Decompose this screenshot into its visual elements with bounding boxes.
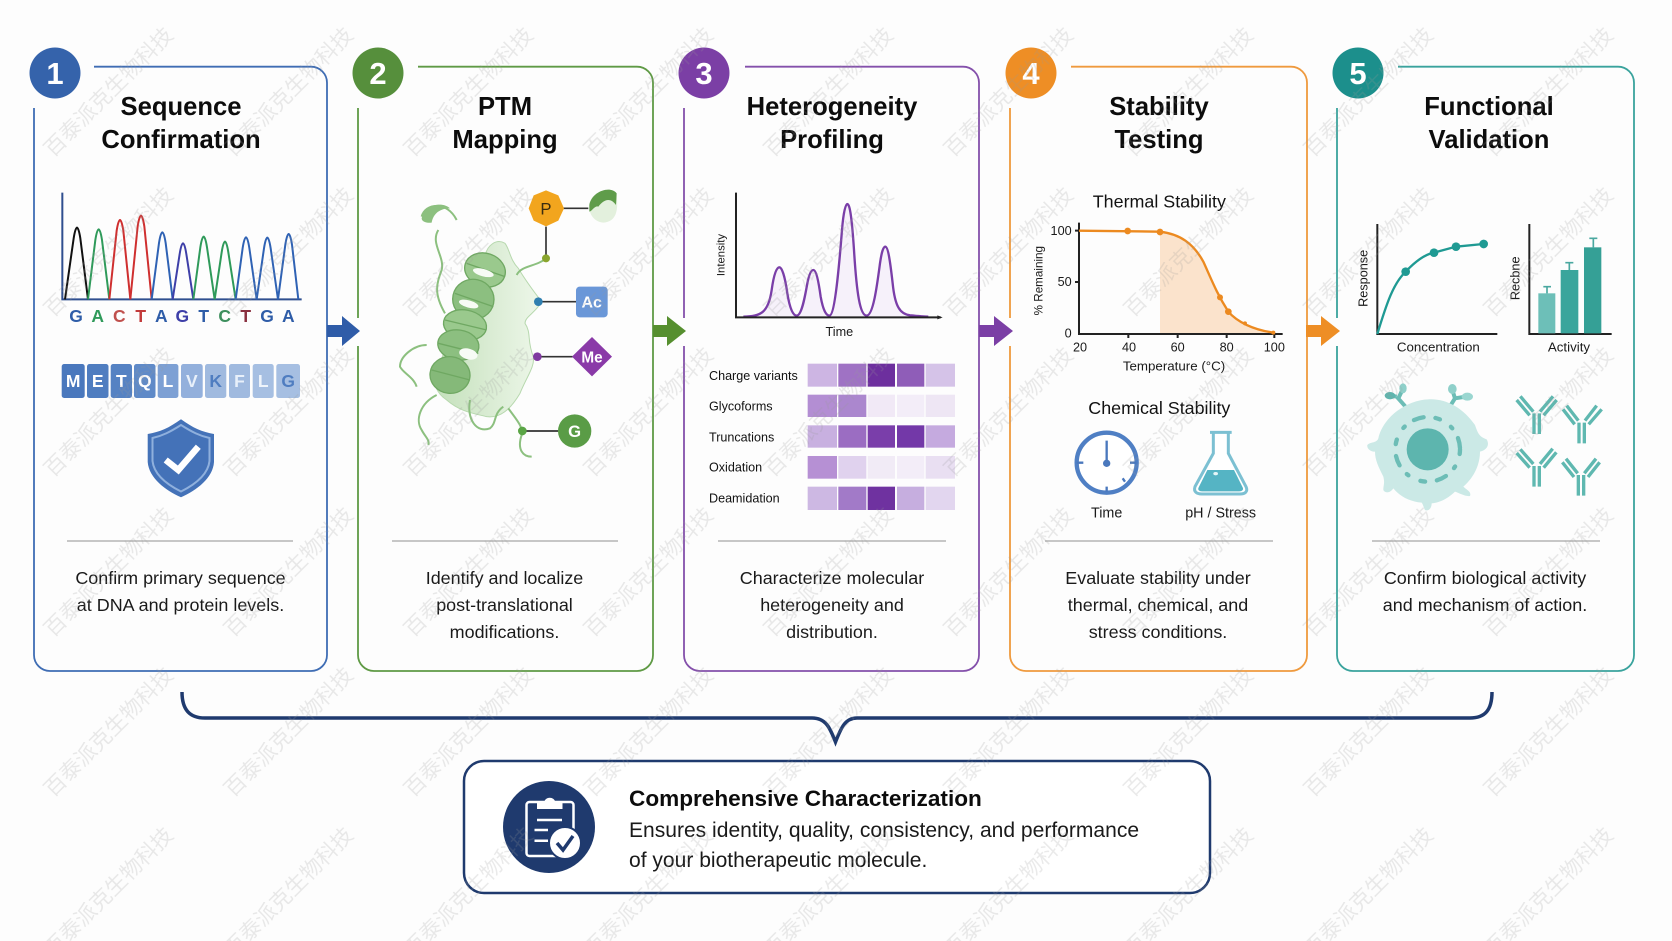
connector lines	[522, 208, 588, 431]
heading: functional validation: Functional	[1424, 93, 1554, 121]
watermark: 百泰派克生物科技	[760, 183, 898, 322]
watermark: 百泰派克生物科技	[1120, 343, 1258, 482]
description: Evaluate stability under	[1065, 568, 1251, 588]
badge: step 1	[30, 48, 80, 98]
PTM: glycosylation: G	[568, 422, 581, 441]
watermark: 百泰派克生物科技	[220, 503, 358, 642]
chart: dose response curve	[1357, 224, 1497, 355]
icon: antibodies	[1517, 396, 1602, 496]
description: modifications.	[450, 622, 559, 642]
arrow: step 1 to 2	[327, 316, 360, 346]
heatmap: variant attributes	[709, 364, 955, 510]
description: at DNA and protein levels.	[77, 595, 284, 615]
icon: clipboard check	[503, 781, 595, 873]
sequence letters: DNA bases	[69, 306, 295, 326]
description: Confirm primary sequence	[75, 568, 286, 588]
arrow: step 2 to 3	[653, 316, 686, 346]
chart: chromatogram peaks: Intensity	[716, 234, 728, 276]
heading: stability testing: Testing	[1114, 126, 1204, 154]
peptide sequence boxes: F	[234, 371, 245, 391]
heading: stability testing: Stability	[1109, 93, 1210, 121]
icon: flask	[1195, 432, 1247, 494]
panel: functional validation	[1332, 48, 1634, 671]
watermark: 百泰派克生物科技	[1480, 663, 1618, 802]
sequence letters: DNA bases: C	[218, 306, 231, 326]
sequence letters: DNA bases: G	[69, 306, 83, 326]
description: Characterize molecular	[740, 568, 924, 588]
watermark: 百泰派克生物科技	[1120, 23, 1258, 162]
sequence letters: DNA bases: T	[135, 306, 146, 326]
watermark: 百泰派克生物科技	[400, 343, 538, 482]
chart: dose response curve: Concentration	[1397, 340, 1480, 355]
watermark: 百泰派克生物科技	[1480, 183, 1618, 322]
sequence letters: DNA bases: T	[198, 306, 209, 326]
chemical stability icons: pH / Stress	[1185, 505, 1256, 521]
PTM: acetylation: Ac	[581, 295, 602, 312]
chart: activity bars: Recbne	[1509, 257, 1523, 300]
watermark: 百泰派克生物科技	[1480, 23, 1618, 162]
heading: sequence confirmation: Sequence	[121, 93, 241, 121]
watermark: 百泰派克生物科技	[940, 23, 1078, 162]
protein surface	[435, 242, 542, 417]
callout text: of your biotherapeutic molecule.	[629, 849, 927, 872]
watermark: 百泰派克生物科技	[940, 503, 1078, 642]
chart: thermal stability curve: 80	[1220, 341, 1234, 355]
watermark: 百泰派克生物科技	[940, 183, 1078, 322]
peptide sequence boxes	[62, 364, 300, 398]
description: Confirm biological activity	[1384, 568, 1586, 588]
peptide sequence boxes: L	[163, 371, 174, 391]
watermark: 百泰派克生物科技	[760, 663, 898, 802]
peptide sequence boxes: V	[186, 371, 198, 391]
heading: PTM mapping: PTM	[478, 93, 532, 121]
chart: thermal stability curve: 40	[1122, 341, 1136, 355]
chemical stability icons: Time	[1091, 505, 1122, 521]
badge: step 3	[678, 48, 730, 98]
watermark: 百泰派克生物科技	[760, 503, 898, 642]
chart: dose response curve: Response	[1357, 250, 1371, 307]
watermark: 百泰派克生物科技	[1480, 503, 1618, 642]
watermark: 百泰派克生物科技	[220, 663, 358, 802]
peptide sequence boxes: E	[92, 371, 104, 391]
watermark: 百泰派克生物科技	[40, 343, 178, 482]
chart: thermal stability curve: Thermal Stability	[1093, 191, 1226, 211]
heading: sequence confirmation: Confirmation	[101, 126, 261, 154]
callout text: Ensures identity, quality, consistency, and performance	[629, 819, 1139, 842]
watermark: 百泰派克生物科技	[220, 23, 358, 162]
sequence letters: DNA bases: A	[155, 306, 168, 326]
watermark: 百泰派克生物科技	[1300, 23, 1438, 162]
PTM: methylation: Me	[581, 349, 603, 366]
icon: clock	[1077, 433, 1137, 493]
heading: heterogeneity profiling: Profiling	[780, 126, 884, 154]
description: Identify and localize	[426, 568, 583, 588]
peptide sequence boxes: G	[281, 371, 295, 391]
heading: heterogeneity profiling: Heterogeneity	[747, 93, 918, 121]
panel: sequence confirmation	[30, 48, 327, 671]
chemical stability icons	[1077, 398, 1256, 521]
badge: step 2	[352, 48, 404, 98]
sequence letters: DNA bases: A	[91, 306, 104, 326]
chart: activity bars: Activity	[1548, 340, 1590, 355]
watermark: 百泰派克生物科技	[40, 503, 178, 642]
chart: thermal stability curve: 100	[1051, 224, 1072, 238]
badge: step 4	[1006, 48, 1056, 98]
badge: step 4: 4	[1022, 56, 1040, 91]
alpha helix	[428, 248, 510, 395]
arrow: step 3 to 4	[979, 316, 1013, 346]
icon: verified shield	[148, 419, 214, 497]
chart: thermal stability curve: 100	[1264, 341, 1285, 355]
panel: stability testing	[1006, 48, 1307, 671]
watermark: 百泰派克生物科技	[1120, 183, 1258, 322]
PTM: acetylation	[534, 287, 608, 317]
PTM: phosphorylation: P	[540, 199, 552, 218]
badge: step 5	[1332, 48, 1384, 98]
watermark: 百泰派克生物科技	[1480, 343, 1618, 482]
heading: functional validation: Validation	[1429, 126, 1549, 154]
watermark: 百泰派克生物科技	[400, 503, 538, 642]
watermark: 百泰派克生物科技	[40, 183, 178, 322]
badge: step 1: 1	[46, 56, 64, 91]
peptide sequence boxes: M	[66, 371, 80, 391]
heatmap: variant attributes: Truncations	[709, 430, 774, 444]
description: and mechanism of action.	[1383, 595, 1587, 615]
chemical stability icons: Chemical Stability	[1088, 398, 1230, 418]
summary callout	[464, 761, 1210, 893]
loops	[400, 206, 546, 457]
description: stress conditions.	[1089, 622, 1227, 642]
badge: step 2: 2	[369, 56, 387, 91]
chart: thermal stability curve: 0	[1065, 327, 1072, 341]
chart: thermal stability curve	[1033, 191, 1285, 374]
sequence letters: DNA bases: T	[240, 306, 251, 326]
sequence letters: DNA bases: A	[282, 306, 295, 326]
sequence letters: DNA bases: C	[113, 306, 126, 326]
watermark: 百泰派克生物科技	[580, 663, 718, 802]
watermark: 百泰派克生物科技	[580, 343, 718, 482]
watermark: 百泰派克生物科技	[940, 343, 1078, 482]
illustration: target cell with receptors	[1367, 383, 1488, 510]
callout heading: Comprehensive Characterization	[629, 786, 982, 811]
watermark: 百泰派克生物科技	[220, 343, 358, 482]
brace joining all steps	[182, 692, 1492, 742]
sequence letters: DNA bases: G	[175, 306, 189, 326]
panel: PTM mapping	[352, 48, 653, 671]
watermark: 百泰派克生物科技	[940, 663, 1078, 802]
watermark: 百泰派克生物科技	[400, 23, 538, 162]
chart: thermal stability curve: % Remaining	[1033, 246, 1046, 315]
description: post-translational	[436, 595, 573, 615]
watermark: 百泰派克生物科技	[580, 503, 718, 642]
watermark: 百泰派克生物科技	[760, 23, 898, 162]
chart: activity bars	[1509, 224, 1612, 355]
watermark: 百泰派克生物科技	[760, 343, 898, 482]
arrow: step 4 to 5	[1306, 316, 1340, 346]
description: distribution.	[786, 622, 878, 642]
chart: thermal stability curve: 20	[1073, 341, 1087, 355]
peptide sequence boxes: K	[209, 371, 222, 391]
chart: thermal stability curve: 60	[1171, 341, 1185, 355]
heatmap: variant attributes: Charge variants	[709, 369, 798, 383]
watermark: 百泰派克生物科技	[580, 183, 718, 322]
illustration: protein ribbon with PTM sites	[400, 190, 617, 457]
glycan blob	[589, 190, 617, 223]
watermark: 百泰派克生物科技	[400, 183, 538, 322]
chart: thermal stability curve: Temperature (°C)	[1123, 359, 1225, 374]
watermark: 百泰派克生物科技	[1120, 663, 1258, 802]
watermark: 百泰派克生物科技	[40, 23, 178, 162]
PTM: methylation	[533, 337, 612, 376]
description: heterogeneity and	[760, 595, 904, 615]
watermark: 百泰派克生物科技	[1300, 663, 1438, 802]
chart: chromatogram peaks: Time	[826, 325, 853, 339]
peptide sequence boxes: L	[258, 371, 269, 391]
PTM: phosphorylation	[529, 190, 564, 226]
chart: chromatogram peaks	[716, 193, 943, 339]
heatmap: variant attributes: Deamidation	[709, 492, 780, 506]
peptide sequence boxes: Q	[138, 371, 152, 391]
description: thermal, chemical, and	[1068, 595, 1248, 615]
peptide sequence boxes: T	[116, 371, 127, 391]
chart: thermal stability curve: 50	[1058, 275, 1072, 289]
watermark: 百泰派克生物科技	[1300, 183, 1438, 322]
watermark: 百泰派克生物科技	[1300, 503, 1438, 642]
watermark: 百泰派克生物科技	[220, 183, 358, 322]
watermark: 百泰派克生物科技	[580, 23, 718, 162]
PTM: glycosylation	[518, 414, 591, 448]
badge: step 5: 5	[1349, 56, 1367, 91]
chart: DNA chromatogram	[62, 193, 302, 299]
watermark: 百泰派克生物科技	[1120, 503, 1258, 642]
heatmap: variant attributes: Glycoforms	[709, 400, 773, 414]
heatmap: variant attributes: Oxidation	[709, 461, 762, 475]
panel: heterogeneity profiling	[678, 48, 979, 671]
watermark: 百泰派克生物科技	[40, 663, 178, 802]
sequence letters: DNA bases: G	[260, 306, 274, 326]
watermark: 百泰派克生物科技	[400, 663, 538, 802]
watermark: 百泰派克生物科技	[1300, 343, 1438, 482]
badge: step 3: 3	[695, 56, 713, 91]
heading: PTM mapping: Mapping	[452, 126, 558, 154]
